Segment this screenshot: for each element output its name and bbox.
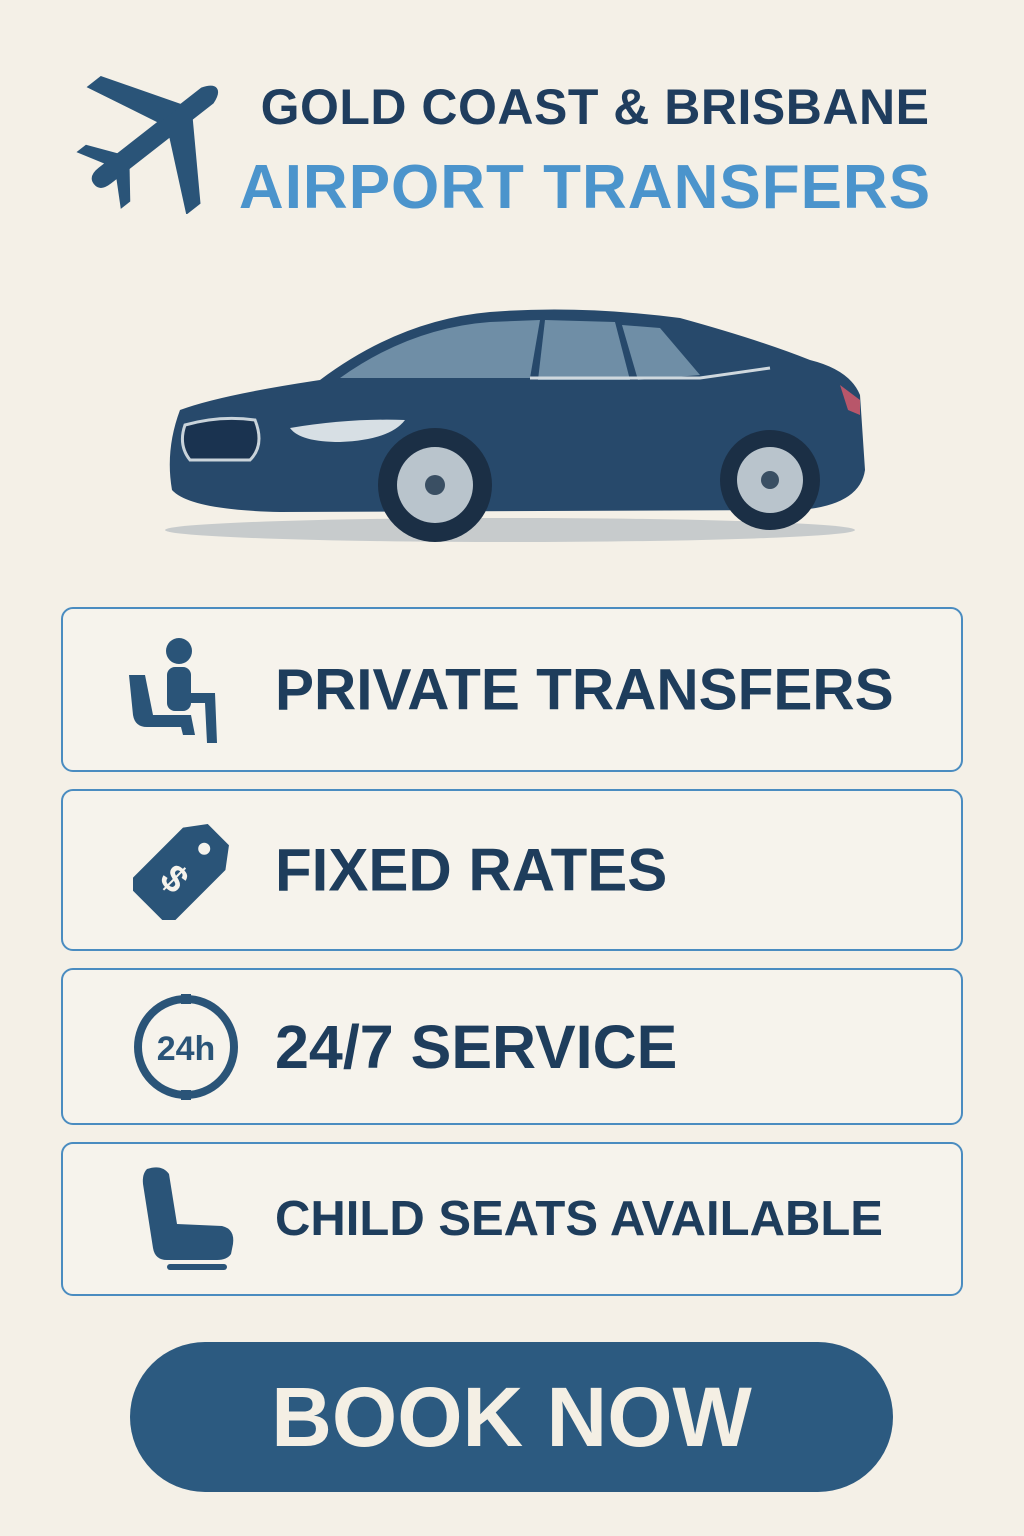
panel: fixed rates: [61, 789, 963, 951]
title line 1: GOLD COAST & BRISBANE: [261, 79, 929, 135]
button: book now: BOOK NOW: [271, 1370, 752, 1464]
icon: airplane: [76, 76, 218, 214]
label: CHILD SEATS AVAILABLE: [275, 1192, 883, 1246]
car illustration: [165, 310, 865, 542]
label: PRIVATE TRANSFERS: [275, 657, 894, 722]
panel: private transfers: [61, 607, 963, 772]
button: book now: [130, 1342, 893, 1492]
icon: child seat: [142, 1167, 234, 1270]
panel: child seats: [61, 1142, 963, 1296]
panel: 24/7 service: [61, 968, 963, 1125]
label: 24/7 SERVICE: [275, 1012, 677, 1080]
icon: seated person: [129, 638, 217, 743]
icon: 24h clock: 24h: [157, 1030, 215, 1068]
label: FIXED RATES: [275, 836, 667, 904]
icon: 24h clock: [134, 994, 238, 1100]
icon: price tag: $: [151, 857, 196, 902]
title line 2: AIRPORT TRANSFERS: [239, 153, 931, 222]
icon: price tag: [133, 824, 229, 920]
